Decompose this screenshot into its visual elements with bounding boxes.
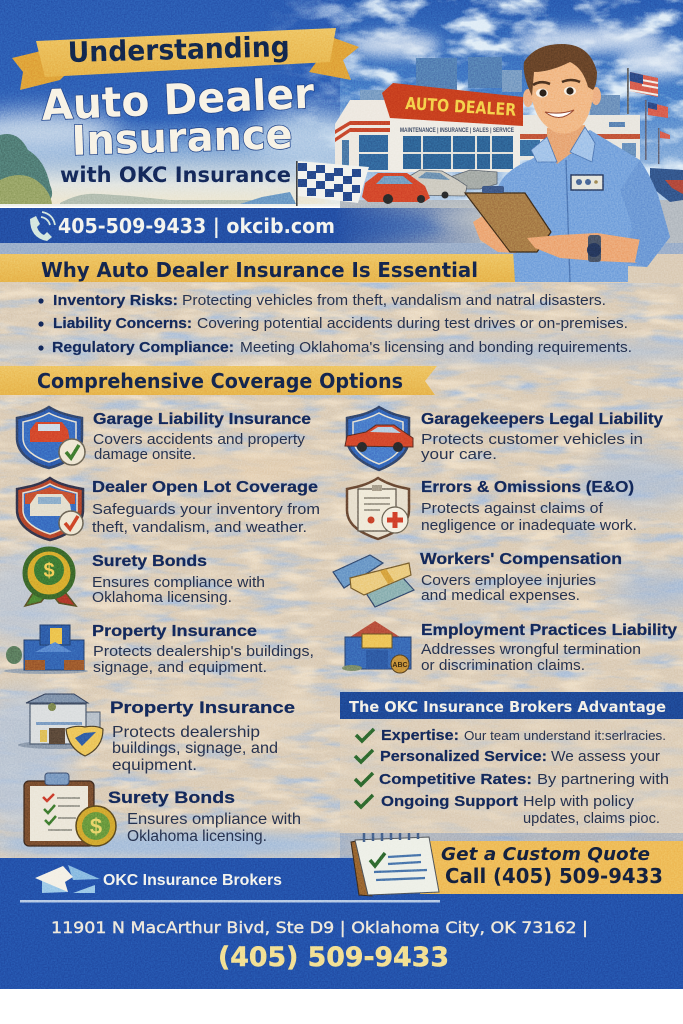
coverage: garagekeepers legal liability: your care. <box>421 446 497 463</box>
tree and horizon at left <box>0 134 340 206</box>
section banner: comprehensive coverage options: Comprehensive Coverage Options <box>37 369 403 393</box>
wristwatch <box>588 235 601 262</box>
advantage: ongoing support: updates, claims pioc. <box>523 810 660 827</box>
bullets: why insurance is essential: Regulatory Compliance: <box>52 339 234 356</box>
cars on the lot <box>362 168 683 204</box>
advantage: expertise: Our team understand it:serlracies. <box>464 728 666 743</box>
icon: shield with red car <box>17 407 85 468</box>
name badge <box>571 175 603 190</box>
coverage: property insurance, large: Property Insurance <box>110 698 295 717</box>
coverage: employment practices liability: Addresses wrongful termination <box>421 641 641 658</box>
coverage: surety bonds: Surety Bonds <box>92 553 207 570</box>
coverage: dealer open lot coverage: Safeguards your inventory from <box>92 501 320 518</box>
american flags <box>627 68 670 164</box>
left hand behind clipboard <box>473 208 516 253</box>
advantage: expertise: Expertise: <box>381 727 459 744</box>
coverage: errors and omissions: negligence or inadequate work. <box>421 517 637 534</box>
phone bar: 405-509-9433 | okcib.com <box>58 214 335 238</box>
coverage: property insurance: signage, and equipment. <box>93 659 267 676</box>
logo: okc insurance brokers <box>35 865 282 893</box>
coverage: property insurance: Protects dealership's buildings, <box>93 643 314 660</box>
logo: okc insurance brokers: OKC Insurance Brokers <box>103 872 282 889</box>
coverage: property insurance: Property Insurance <box>92 623 257 640</box>
city towers <box>360 57 620 117</box>
subtitle: with okc insurance: with OKC Insurance <box>60 163 291 187</box>
title ribbon <box>12 28 359 90</box>
advantage: competitive rates: Competitive Rates: <box>379 771 532 788</box>
coverage: garage liability insurance <box>17 407 311 468</box>
advantage: ongoing support <box>355 793 660 827</box>
icon: dollar medal: $ <box>43 560 55 582</box>
bullets: why insurance is essential: Meeting Oklahoma's licensing and bonding requirements. <box>240 339 632 356</box>
bullets: why insurance is essential: Covering potential accidents during test drives or on-premises. <box>197 315 628 332</box>
coverage: dealer open lot coverage <box>17 478 320 540</box>
icon: shield with side car <box>345 407 413 470</box>
advantage: competitive rates: By partnering with <box>537 771 669 788</box>
coverage: employment practices liability: Employment Practices Liability <box>421 622 677 639</box>
advantage: ongoing support: Ongoing Support <box>381 793 518 810</box>
coverage: surety bonds, large <box>24 773 301 846</box>
bullets: why insurance is essential <box>38 292 632 356</box>
ground and parking lot <box>0 200 683 254</box>
coverage: errors and omissions: Errors & Omissions (E&O) <box>421 479 634 496</box>
coverage: property insurance <box>4 623 314 676</box>
coverage: errors and omissions: Protects against claims of <box>421 500 604 517</box>
advantage: competitive rates <box>355 771 669 788</box>
icon: dealership storefront with coin: ABC <box>392 662 408 669</box>
advantage: expertise <box>356 727 666 744</box>
coverage: surety bonds <box>25 549 265 606</box>
advantage: ongoing support: Help with policy <box>523 793 635 810</box>
footer background <box>0 833 683 989</box>
coverage: property insurance, large <box>18 694 295 774</box>
coverage: workers compensation: and medical expenses. <box>421 587 580 604</box>
sign: auto dealer <box>382 83 523 126</box>
coverage: workers compensation: Covers employee injuries <box>421 572 596 589</box>
title: auto dealer insurance: Auto Dealer <box>40 69 315 130</box>
icon: checklist clipboard with coin: $ <box>90 814 102 839</box>
advantage: personalized service: We assess your <box>551 748 660 765</box>
salesperson illustration <box>465 44 670 282</box>
coverage: surety bonds, large: Oklahoma licensing. <box>127 828 267 845</box>
panel header <box>340 692 683 719</box>
coverage: dealer open lot coverage: theft, vandalism, and weather. <box>92 519 307 536</box>
icon: spiral notebook <box>351 833 439 896</box>
footer address: 11901 N MacArthur Bivd, Ste D9 | Oklahoma City, OK 73162 | <box>51 918 588 937</box>
panel: okc insurance brokers advantage <box>340 692 683 836</box>
parchment background <box>0 254 683 859</box>
bullets: why insurance is essential: Liability Concerns: <box>53 315 192 332</box>
hero background <box>0 0 683 205</box>
title: auto dealer insurance: Insurance <box>71 110 293 165</box>
icon: cash stacks and bundle <box>333 555 414 607</box>
title ribbon: Understanding <box>67 30 290 69</box>
coverage: surety bonds, large: Ensures ompliance with <box>127 811 301 828</box>
coverage: surety bonds, large: Surety Bonds <box>108 788 235 807</box>
coverage: dealer open lot coverage: Dealer Open Lot Coverage <box>92 479 318 496</box>
footer phone number: (405) 509-9433 <box>218 942 449 973</box>
advantage: personalized service <box>355 748 660 765</box>
icon: dealership storefront with coin <box>342 621 411 673</box>
coverage: workers compensation <box>333 551 622 607</box>
call to action: custom quote: Get a Custom Quote <box>441 844 650 865</box>
coverage: employment practices liability <box>342 621 677 674</box>
call to action: custom quote <box>351 833 683 896</box>
coverage: garage liability insurance: damage onsite. <box>94 446 196 463</box>
icon: office building with shield <box>18 694 103 756</box>
coverage: garage liability insurance: Garage Liability Insurance <box>93 411 311 428</box>
icon: blue dealership building <box>4 625 88 674</box>
checkered flag <box>296 161 369 206</box>
panel header: The OKC Insurance Brokers Advantage <box>349 698 666 716</box>
clipboard <box>465 193 551 252</box>
coverage: garagekeepers legal liability <box>345 407 663 470</box>
coverage: surety bonds: Ensures compliance with <box>92 574 265 591</box>
icon: dollar medal <box>25 549 76 606</box>
title: auto dealer insurance <box>40 69 315 165</box>
coverage: surety bonds: Oklahoma licensing. <box>92 589 232 606</box>
bullets: why insurance is essential: Protecting vehicles from theft, vandalism and natral disasters. <box>182 292 606 309</box>
call to action: custom quote: Call (405) 509-9433 <box>445 864 663 888</box>
icon: telephone <box>30 212 55 241</box>
section banner: why auto dealer insurance is essential: Why Auto Dealer Insurance Is Essential <box>41 258 478 282</box>
coverage: employment practices liability: or discrimination claims. <box>421 657 585 674</box>
right hand and forearm <box>527 233 642 263</box>
bullets: why insurance is essential: Inventory Risks: <box>53 292 178 309</box>
sign: auto dealer: AUTO DEALER <box>405 94 517 121</box>
coverage: property insurance, large: Protects dealership <box>112 724 260 741</box>
coverage: property insurance, large: equipment. <box>112 757 197 774</box>
coverage: garagekeepers legal liability: Garagekeepers Legal Liability <box>421 411 663 428</box>
icon: checklist clipboard with coin <box>24 773 116 846</box>
icon: shield with white car <box>17 478 83 540</box>
coverage: garage liability insurance: Covers accidents and property <box>93 431 306 448</box>
advantage: personalized service: Personalized Service: <box>380 748 547 765</box>
phone bar <box>0 208 480 243</box>
icon: document shield with cross <box>347 478 409 539</box>
dealership building <box>335 83 640 172</box>
coverage: property insurance, large: buildings, signage, and <box>112 740 278 757</box>
dealership building: MAINTENANCE | INSURANCE | SALES | SERVICE <box>400 128 514 134</box>
coverage: errors and omissions <box>347 478 637 539</box>
coverage: workers compensation: Workers' Compensation <box>420 551 622 568</box>
coverage: garagekeepers legal liability: Protects customer vehicles in <box>421 431 643 448</box>
